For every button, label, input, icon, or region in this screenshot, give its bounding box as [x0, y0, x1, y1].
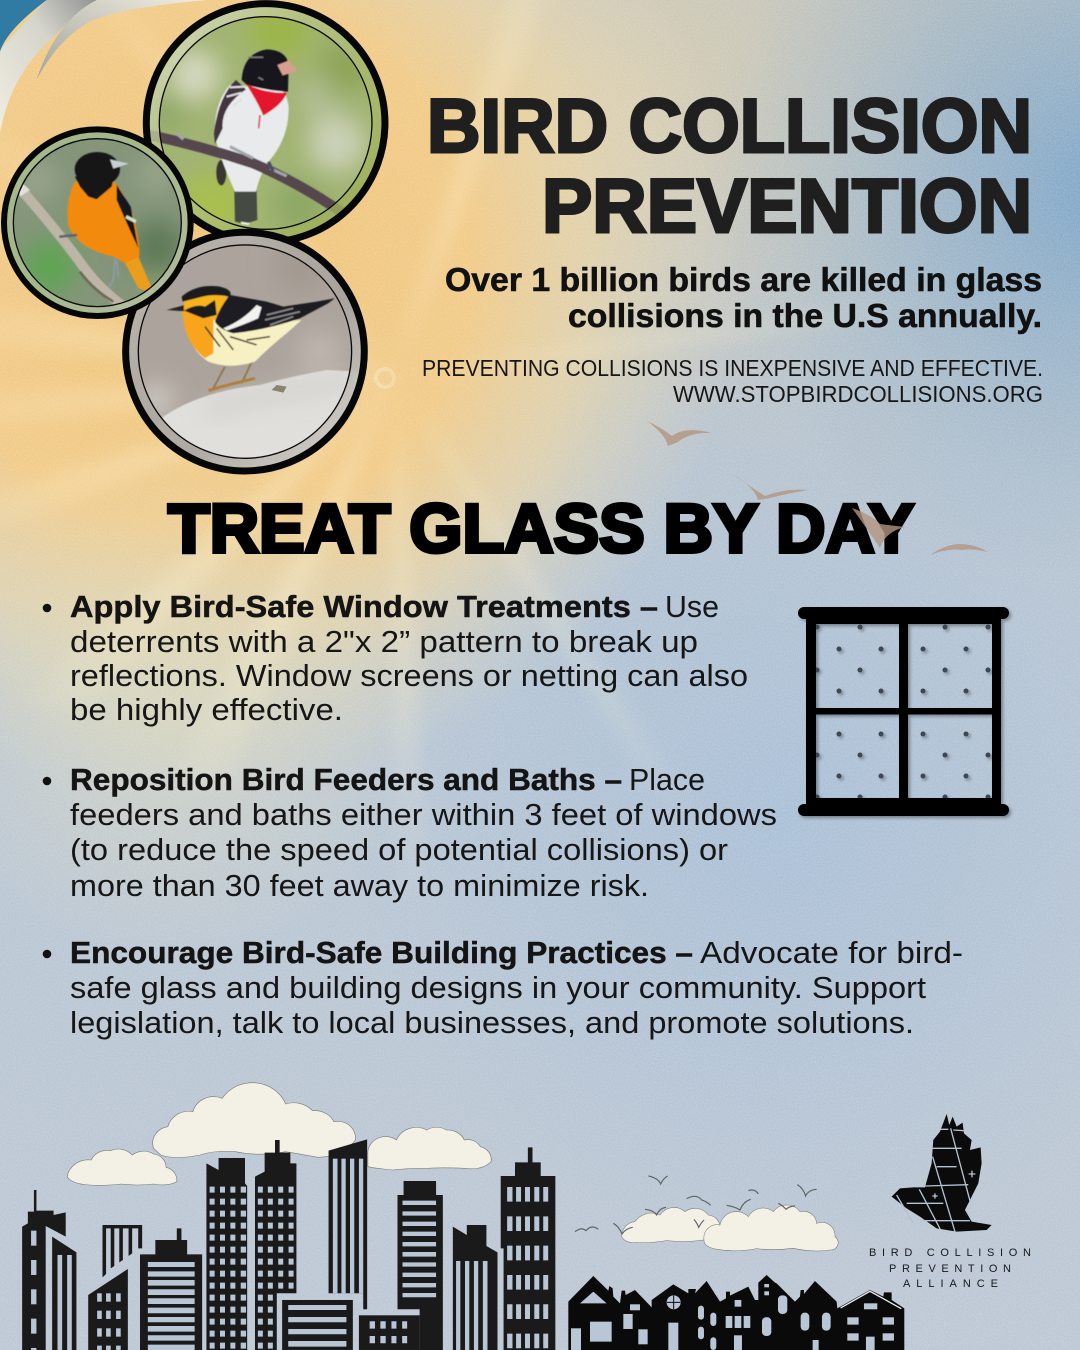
website note: PREVENTING COLLISIONS IS INEXPENSIVE AND EFFECTIVE.	[422, 355, 1043, 381]
tower windows	[31, 1159, 548, 1350]
tip: reposition feeders and baths: more than 30 feet away to minimize risk.	[70, 868, 649, 903]
tip: bird-safe window treatments: Apply Bird-Safe Window Treatments –	[70, 589, 658, 624]
tip: reposition feeders and baths: Place	[629, 762, 705, 797]
tip: bird-safe window treatments: Use	[665, 589, 719, 624]
website note: WWW.STOPBIRDCOLLISIONS.ORG	[673, 381, 1043, 407]
title	[427, 84, 1032, 249]
tip: bird-safe building practices	[43, 935, 963, 1040]
clouds with birds	[575, 1176, 838, 1251]
neighbourhood: clouds, birds, houses	[568, 1176, 904, 1350]
title: BIRD COLLISION	[427, 84, 1032, 169]
tip: bird-safe window treatments	[43, 589, 748, 727]
tip: bird-safe window treatments: reflections. Window screens or netting can also	[70, 658, 748, 693]
tip: bird-safe window treatments: be highly effective.	[70, 692, 343, 727]
tip: bird-safe building practices: Advocate for bird-	[700, 935, 963, 970]
photo: blackburnian warbler	[120, 227, 370, 477]
faint flying birds	[647, 421, 988, 555]
logo: Bird Collision Prevention Alliance: BIRD COLLISION	[869, 1247, 1031, 1259]
clouds	[67, 1083, 491, 1185]
heading: treat glass by day: TREAT GLASS BY DAY	[168, 490, 914, 567]
icon: window with dot pattern	[798, 607, 1009, 816]
tip: reposition feeders and baths: Reposition Bird Feeders and Baths –	[70, 762, 622, 797]
tip: reposition feeders and baths: feeders and baths either within 3 feet of windows	[70, 797, 777, 832]
subtitle	[445, 261, 1042, 334]
logo: Bird Collision Prevention Alliance	[869, 1114, 1031, 1290]
logo: Bird Collision Prevention Alliance: PREVENTION	[889, 1263, 1011, 1275]
tip: bird-safe window treatments: deterrents with a 2"x 2” pattern to break up	[70, 624, 698, 659]
title: PREVENTION	[542, 164, 1032, 249]
website note	[422, 355, 1043, 407]
photo: rose-breasted grosbeak	[140, 0, 393, 247]
tower silhouettes	[22, 1139, 555, 1350]
tip: bird-safe building practices: safe glass and building designs in your community. Support	[70, 970, 926, 1005]
tip: reposition feeders and baths: (to reduce the speed of potential collisions) or	[70, 832, 728, 867]
city skyline with clouds	[22, 1083, 555, 1350]
subtitle: Over 1 billion birds are killed in glass	[445, 261, 1042, 298]
logo: Bird Collision Prevention Alliance: ALLIANCE	[903, 1278, 998, 1290]
subtitle: collisions in the U.S annually.	[568, 297, 1042, 334]
tip: bird-safe building practices: Encourage Bird-Safe Building Practices –	[70, 935, 693, 970]
photo: baltimore oriole	[0, 127, 197, 323]
tip: reposition feeders and baths	[43, 762, 777, 903]
corner swoosh	[0, 0, 207, 133]
bird photo circles	[0, 0, 393, 477]
tip: bird-safe building practices: legislation, talk to local businesses, and promote solutions.	[70, 1005, 914, 1040]
houses	[568, 1275, 904, 1350]
